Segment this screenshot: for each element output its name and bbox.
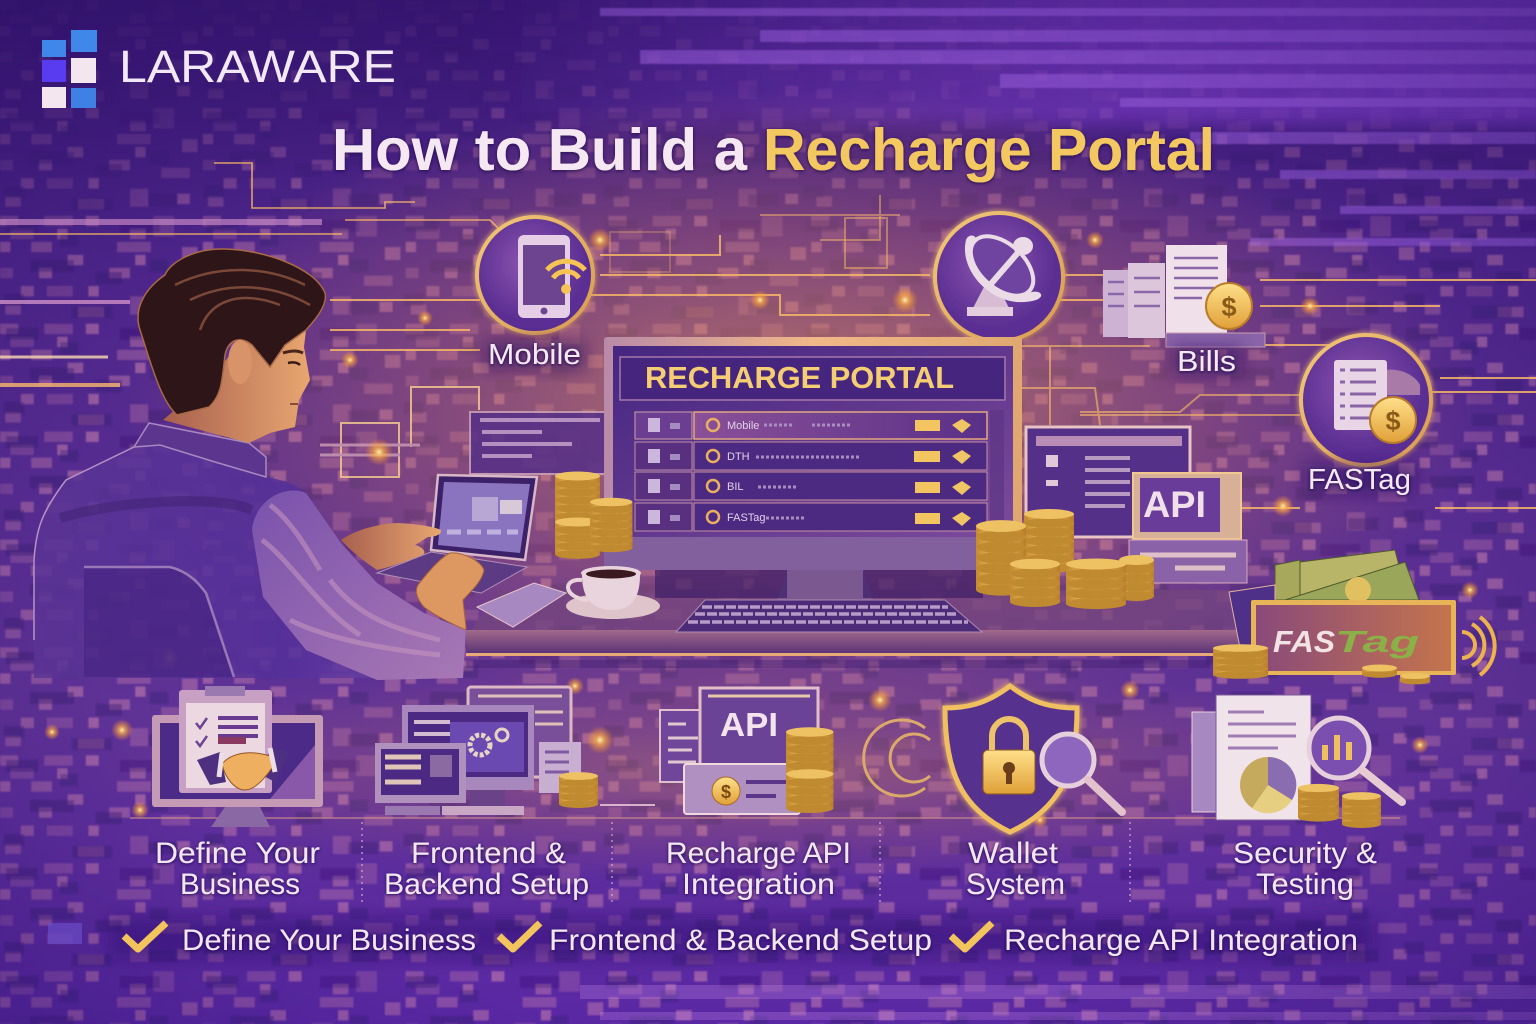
label: mobile: Mobile: [488, 339, 581, 371]
portal rows: [635, 410, 1004, 531]
step 4 label: Wallet: [968, 837, 1059, 870]
title: [332, 117, 1215, 183]
step 3 icon: [660, 688, 834, 814]
icon: mobile: [477, 217, 593, 333]
shirt: [34, 423, 466, 678]
background screens: [470, 412, 610, 474]
step 5 icon: [1192, 695, 1402, 828]
api screens: API: [1143, 484, 1206, 525]
check item 3: Recharge API Integration: [1004, 924, 1358, 957]
logo wordmark: LARAWARE: [119, 41, 396, 92]
logo mark: [42, 30, 97, 108]
logo: [42, 30, 396, 108]
icon: fastag: [1301, 335, 1431, 465]
step 1 label: Define Your: [155, 837, 320, 870]
step 2 icon: [375, 687, 598, 815]
hair: [138, 249, 325, 415]
chair: [84, 567, 234, 677]
coins: left stacks: [555, 472, 632, 559]
label: fastag: FASTag: [1308, 464, 1411, 496]
label: bills: Bills: [1177, 346, 1236, 378]
portal heading: RECHARGE PORTAL: [645, 360, 954, 395]
step 1 label: [155, 837, 320, 901]
wallet with cash: FAS: [1273, 624, 1335, 659]
hands: [341, 523, 441, 570]
step 4 label: [966, 837, 1065, 901]
laptop: [377, 475, 537, 593]
portal rows: Mobile: [727, 420, 759, 432]
person: [34, 249, 537, 680]
circuit lines: [0, 163, 1536, 905]
step 3 label: [666, 837, 851, 901]
title: Recharge Portal: [763, 117, 1215, 183]
step 2 label: Frontend &: [411, 837, 566, 870]
step 5 label: Testing: [1256, 868, 1354, 901]
icon: bills: $: [1221, 292, 1237, 322]
step 3 label: Recharge API: [666, 837, 851, 870]
icon: satellite dish: [935, 213, 1063, 341]
step 3 icon: $: [721, 782, 731, 802]
coffee cup: [566, 566, 660, 619]
check item 1: Define Your Business: [182, 924, 476, 957]
portal rows: BIL: [727, 481, 744, 493]
step 5 label: [1233, 837, 1377, 901]
portal rows: FASTag: [727, 512, 766, 524]
sleeve: [252, 491, 466, 680]
step 3 icon: API: [720, 706, 778, 743]
step 1 icon: [152, 686, 323, 827]
step 4 icon: [864, 686, 1122, 832]
portal heading: [620, 357, 1005, 400]
sparkles: [44, 228, 1479, 828]
desk: [466, 590, 1240, 664]
portal rows: DTH: [727, 451, 750, 463]
icon: fastag: $: [1385, 406, 1401, 436]
monitor: [604, 337, 1022, 606]
ear: [228, 340, 252, 384]
check item 2: Frontend & Backend Setup: [549, 924, 932, 957]
coins: right stacks: [976, 509, 1154, 609]
step 2 label: Backend Setup: [384, 868, 589, 901]
papers: [477, 583, 566, 627]
step 3 label: Integration: [682, 868, 835, 901]
wallet with cash: Tag: [1335, 624, 1419, 659]
step 5 label: Security &: [1233, 837, 1377, 870]
api screens: [1026, 427, 1247, 583]
icon: bills: [1103, 245, 1265, 347]
keyboard: [676, 600, 982, 632]
neck and face: [163, 330, 310, 443]
step 1 label: Business: [180, 868, 300, 901]
step 4 label: System: [966, 868, 1065, 901]
title: How to Build a: [332, 117, 748, 183]
wallet with cash: [1213, 550, 1495, 684]
collar: [134, 423, 266, 477]
checklist: [48, 918, 1375, 958]
step 2 label: [384, 837, 589, 901]
